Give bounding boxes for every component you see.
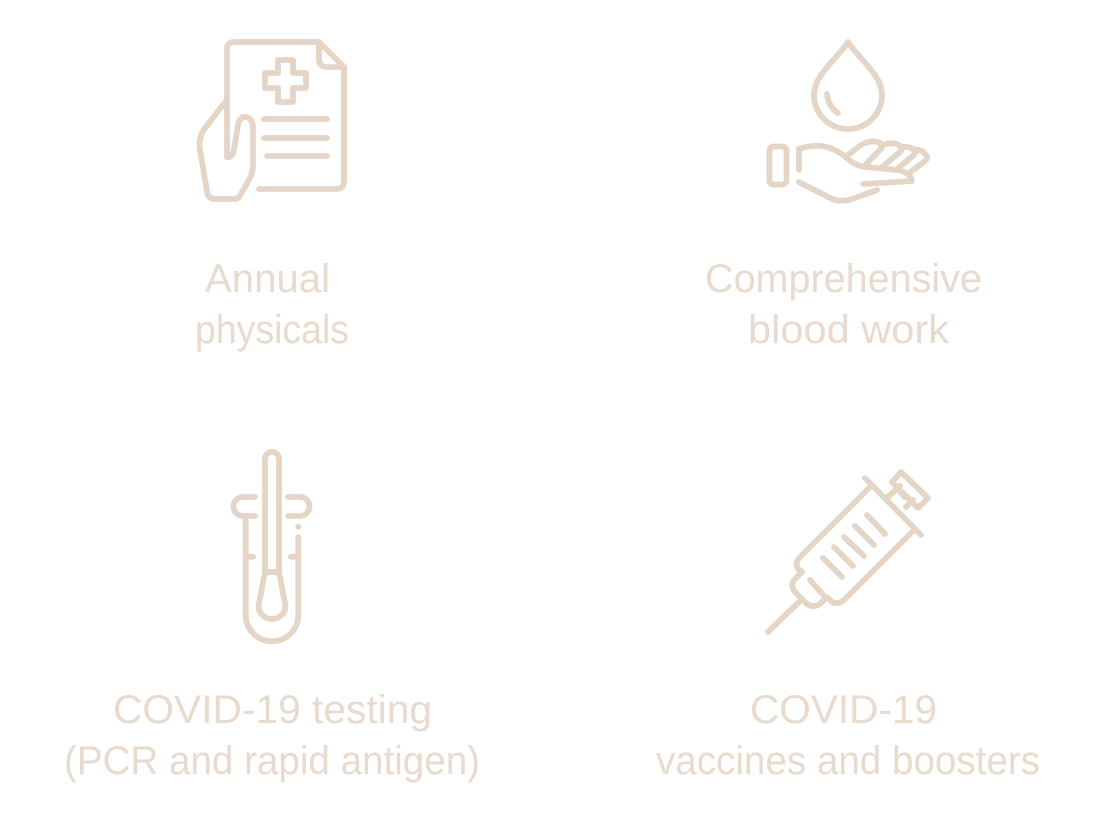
label: covid-19 vaccines and boosters: vaccines and boosters xyxy=(656,739,1040,783)
label: covid-19 testing xyxy=(64,688,480,783)
icon: medical document held in hand xyxy=(200,42,344,199)
icon: blood drop over open hand xyxy=(770,42,927,201)
label: annual physicals: physicals xyxy=(195,308,349,352)
label: comprehensive blood work xyxy=(705,257,982,352)
label: covid-19 testing: COVID-19 testing xyxy=(113,688,432,732)
label: comprehensive blood work: blood work xyxy=(748,308,950,352)
label: comprehensive blood work: Comprehensive xyxy=(705,257,982,301)
label: annual physicals xyxy=(195,257,349,352)
label: covid-19 vaccines and boosters xyxy=(656,688,1040,783)
label: covid-19 testing: (PCR and rapid antigen) xyxy=(64,739,480,783)
label: covid-19 vaccines and boosters: COVID-19 xyxy=(750,688,937,732)
icon: syringe xyxy=(768,472,928,632)
label: annual physicals: Annual xyxy=(205,257,330,301)
icon: swab in test tube xyxy=(234,452,310,641)
